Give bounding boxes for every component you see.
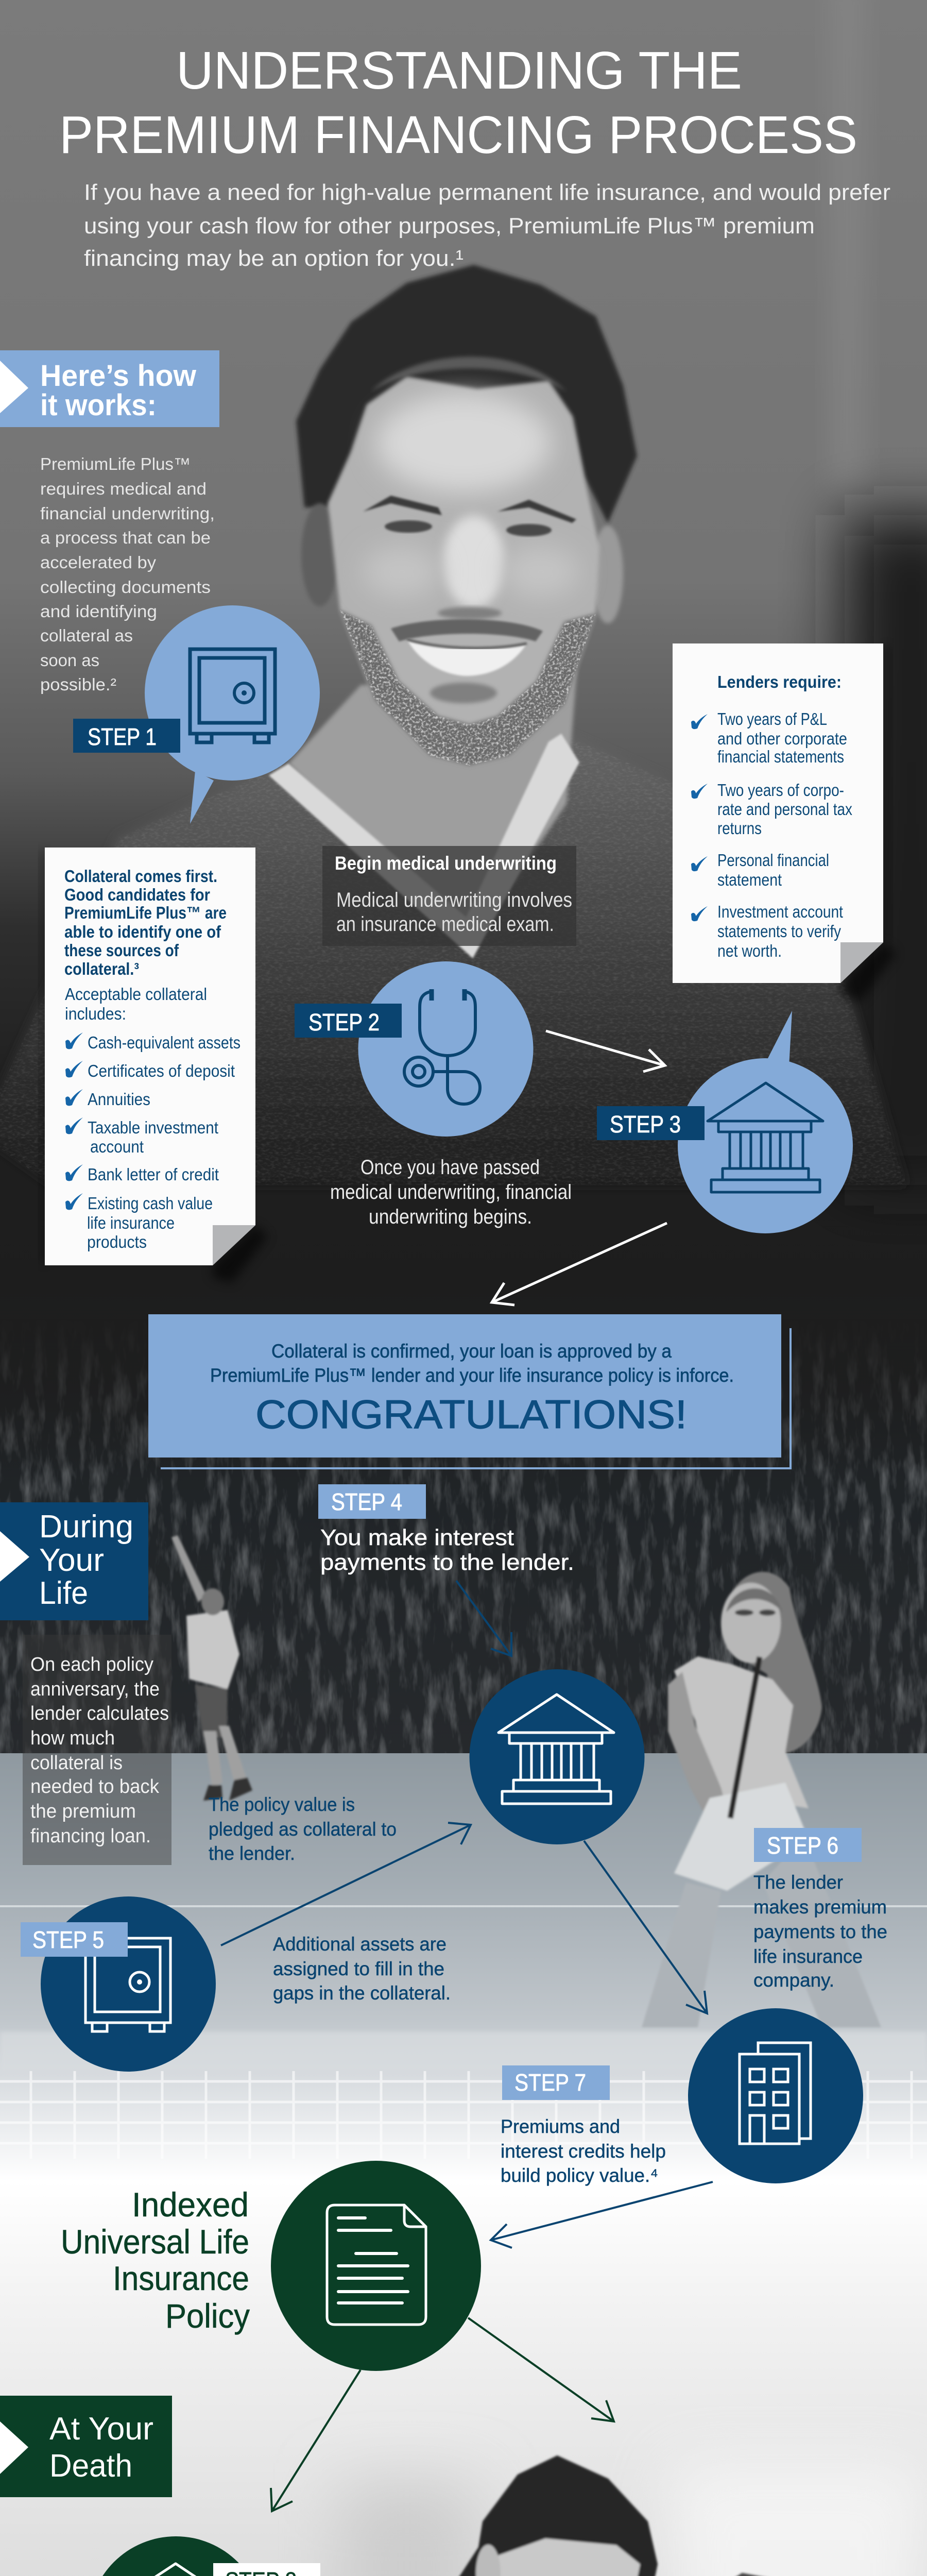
text: lender requirements list: financial statements bbox=[717, 747, 844, 766]
panel: congratulations: CONGRATULATIONS! bbox=[255, 1392, 687, 1437]
callout: policy anniversary: On each policy bbox=[30, 1654, 153, 1675]
title: PREMIUM FINANCING PROCESS bbox=[59, 105, 857, 164]
text block: how it works: collateral as bbox=[40, 626, 133, 645]
text: premiums and credits: build policy value.⁴ bbox=[501, 2165, 658, 2186]
heading: indexed universal life insurance policy: Indexed bbox=[132, 2185, 249, 2224]
callout: begin medical underwriting: Medical underwriting involves bbox=[336, 889, 572, 911]
arrow: step 3 to congratulations bbox=[492, 1223, 667, 1305]
heading: during your life bbox=[0, 1502, 148, 1620]
intro text: If you have a need for high-value permanent life insurance, and would prefer bbox=[84, 180, 890, 205]
heading: indexed universal life insurance policy: Policy bbox=[165, 2297, 250, 2335]
text: acceptable collateral list: Annuities bbox=[88, 1090, 150, 1109]
text block: how it works: a process that can be bbox=[40, 528, 211, 547]
callout: policy anniversary bbox=[23, 1635, 171, 1865]
intro text bbox=[84, 180, 890, 271]
icon: bank bbox=[708, 1083, 823, 1192]
heading: here's how it works: it works: bbox=[40, 388, 157, 422]
heading: during your life: During bbox=[39, 1509, 133, 1545]
arrow: assets to lender bbox=[221, 1823, 471, 1945]
text block: how it works: soon as bbox=[40, 651, 99, 670]
note: collateral requirements bbox=[40, 848, 268, 1283]
text block: how it works: possible.² bbox=[40, 675, 116, 694]
photo: man portrait background bbox=[0, 0, 927, 1288]
text: acceptable collateral list: account bbox=[90, 1137, 144, 1156]
text: acceptable collateral list: Bank letter of credit bbox=[88, 1165, 219, 1184]
text: collateral comes first: Good candidates for bbox=[64, 885, 210, 904]
photo: man serving tennis ball bbox=[171, 1535, 252, 1801]
heading: at your death bbox=[0, 2396, 172, 2497]
text: lender requirements list: Investment account bbox=[717, 902, 843, 921]
callout: policy anniversary: collateral is bbox=[30, 1752, 123, 1774]
text: financial underwriting begins: Once you have passed bbox=[360, 1156, 540, 1179]
text: collateral comes first: Collateral comes first. bbox=[64, 867, 217, 886]
text: lender requirements list: Personal financial bbox=[717, 851, 829, 870]
step 2 bubble bbox=[295, 961, 534, 1137]
photo: man's hair bbox=[296, 265, 637, 523]
text: acceptable collateral list: Cash-equivalent assets bbox=[88, 1033, 241, 1052]
text: additional assets: assigned to fill in the bbox=[273, 1958, 444, 1979]
insurance company icon bbox=[688, 2008, 863, 2183]
text: lender requirements list: statements to verify bbox=[717, 922, 841, 941]
text: acceptable collateral list: includes: bbox=[65, 1004, 126, 1023]
text: additional assets: gaps in the collateral. bbox=[273, 1982, 451, 2004]
icons: check marks bbox=[691, 714, 708, 921]
text: collateral comes first bbox=[64, 867, 227, 978]
text: lender requirements list: net worth. bbox=[717, 941, 782, 960]
panel: congratulations bbox=[148, 1314, 791, 1468]
step 8 bbox=[89, 2536, 320, 2576]
text: interest payments: payments to the lender. bbox=[320, 1550, 574, 1575]
arrow: policy to lender repayment bbox=[271, 2370, 360, 2511]
text: lender requirements list bbox=[717, 709, 852, 960]
text: lender pays premium bbox=[753, 1872, 887, 1991]
policy document icon bbox=[271, 2161, 481, 2371]
label: step 2: STEP 2 bbox=[308, 1009, 380, 1036]
label: step 5 bbox=[21, 1922, 128, 1957]
text: premiums and credits: interest credits help bbox=[501, 2141, 666, 2162]
icons: check marks bbox=[65, 1032, 83, 1210]
step 5 bbox=[21, 1896, 216, 2072]
text: lender requirements list: returns bbox=[717, 819, 762, 838]
step 6: STEP 6 bbox=[767, 1832, 838, 1859]
text: financial underwriting begins: medical underwriting, financial bbox=[330, 1181, 572, 1204]
text: lender pays premium: payments to the bbox=[753, 1921, 887, 1942]
text: financial underwriting begins: underwriting begins. bbox=[369, 1206, 532, 1228]
callout: begin medical underwriting: Begin medical underwriting bbox=[335, 853, 557, 874]
callout: policy anniversary: needed to back bbox=[30, 1776, 160, 1798]
photo: man's ears bbox=[301, 503, 338, 606]
title bbox=[59, 41, 857, 164]
photo: man's face bbox=[328, 377, 599, 766]
text: policy value pledged bbox=[209, 1794, 397, 1864]
arrow: policy to heirs bbox=[468, 2318, 614, 2421]
callout: begin medical underwriting bbox=[322, 846, 576, 946]
text: premiums and credits bbox=[501, 2116, 666, 2186]
photo: mother bbox=[291, 2455, 664, 2576]
icon: bank bbox=[117, 2564, 233, 2576]
text: interest payments bbox=[320, 1525, 574, 1575]
photo: man's beard bbox=[340, 610, 596, 766]
callout: policy anniversary: the premium bbox=[30, 1801, 136, 1822]
text block: how it works: collecting documents bbox=[40, 578, 211, 597]
label: step 1 bbox=[73, 719, 180, 753]
text: acceptable collateral list: Taxable investment bbox=[88, 1118, 218, 1137]
text: acceptable collateral list: Existing cash value bbox=[88, 1194, 213, 1213]
arrow: lender to insurer bbox=[584, 1841, 707, 2013]
text: lender requirements list: statement bbox=[717, 870, 782, 889]
text: interest payments: You make interest bbox=[320, 1525, 514, 1550]
arrow: insurer to policy bbox=[491, 2182, 713, 2248]
step 6 bbox=[753, 1828, 887, 1991]
heading: lenders require: Lenders require: bbox=[717, 672, 842, 691]
heading: during your life: Life bbox=[39, 1575, 88, 1611]
step 4 bbox=[318, 1484, 574, 1575]
text: policy value pledged: The policy value is bbox=[209, 1794, 355, 1815]
label: step 8 bbox=[213, 2563, 320, 2576]
note: lenders require bbox=[673, 643, 896, 1002]
label: step 3 bbox=[597, 1106, 705, 1140]
text: lender pays premium: life insurance bbox=[753, 1946, 863, 1967]
step 1 bubble bbox=[73, 605, 320, 824]
label: step 2 bbox=[295, 1004, 402, 1038]
heading: at your death: Death bbox=[49, 2448, 132, 2484]
text: lender requirements list: Two years of corpo- bbox=[717, 781, 844, 800]
icon: stethoscope bbox=[404, 989, 480, 1104]
heading: indexed universal life insurance policy: Insurance bbox=[113, 2259, 249, 2297]
text block: how it works bbox=[40, 454, 215, 694]
text: lender requirements list: Two years of P&L bbox=[717, 709, 827, 728]
heading: indexed universal life insurance policy: Universal Life bbox=[61, 2223, 249, 2261]
text: policy value pledged: pledged as collateral to bbox=[209, 1819, 397, 1840]
intro text: using your cash flow for other purposes, PremiumLife Plus™ premium bbox=[84, 213, 815, 239]
callout: policy anniversary: how much bbox=[30, 1727, 115, 1749]
text: acceptable collateral list: Certificates of deposit bbox=[88, 1061, 235, 1080]
arrow: step 2 to step 3 bbox=[546, 1031, 665, 1072]
label: step 1: STEP 1 bbox=[88, 723, 157, 750]
step 7: STEP 7 bbox=[514, 2069, 586, 2096]
text block: how it works: financial underwriting, bbox=[40, 504, 215, 523]
text: financial underwriting begins bbox=[330, 1156, 572, 1228]
intro text: financing may be an option for you.¹ bbox=[84, 246, 464, 271]
text: collateral comes first: able to identify one of bbox=[64, 922, 221, 941]
photo: young woman with racket bbox=[642, 1572, 881, 2027]
text: policy value pledged: the lender. bbox=[209, 1843, 295, 1864]
icon: safe bbox=[85, 1938, 170, 2031]
text: lender requirements list: rate and personal tax bbox=[717, 800, 852, 819]
text: lender requirements list: and other corporate bbox=[717, 729, 847, 748]
heading: here's how it works bbox=[0, 350, 219, 427]
panel: congratulations: Collateral is confirmed, your loan is approved by a bbox=[271, 1341, 672, 1362]
text: lender pays premium: The lender bbox=[753, 1872, 843, 1893]
text block: how it works: PremiumLife Plus™ bbox=[40, 454, 191, 473]
heading: indexed universal life insurance policy bbox=[61, 2185, 250, 2335]
text: premiums and credits: Premiums and bbox=[501, 2116, 620, 2137]
label: step 5: STEP 5 bbox=[32, 1926, 104, 1953]
photo: tennis court background bbox=[0, 1288, 927, 2181]
step 3 bubble bbox=[597, 1011, 853, 1233]
step 4: STEP 4 bbox=[331, 1488, 402, 1515]
text: acceptable collateral list bbox=[65, 985, 241, 1251]
step 4 lender icon bbox=[470, 1669, 645, 1844]
text: lender pays premium: company. bbox=[753, 1970, 834, 1991]
text block: how it works: requires medical and bbox=[40, 479, 207, 498]
icon: safe bbox=[190, 649, 275, 742]
text block: how it works: accelerated by bbox=[40, 553, 157, 572]
text block: how it works: and identifying bbox=[40, 602, 157, 621]
text: acceptable collateral list: Acceptable collateral bbox=[65, 985, 207, 1004]
panel: congratulations: PremiumLife Plus™ lender and your life insurance policy is inforce. bbox=[210, 1365, 734, 1386]
text: acceptable collateral list: life insurance bbox=[87, 1213, 175, 1232]
heading: during your life: Your bbox=[39, 1543, 104, 1578]
callout: policy anniversary: anniversary, the bbox=[30, 1679, 160, 1700]
photo: mother and daughter background bbox=[0, 2181, 927, 2576]
photo: daughter bbox=[656, 2573, 927, 2576]
heading: at your death: At Your bbox=[49, 2411, 153, 2447]
text: acceptable collateral list: products bbox=[87, 1232, 147, 1251]
text: lender pays premium: makes premium bbox=[753, 1896, 887, 1918]
text: collateral comes first: these sources of bbox=[64, 941, 179, 960]
text: collateral comes first: PremiumLife Plus™ are bbox=[64, 903, 227, 922]
step 7 bbox=[501, 2065, 666, 2186]
callout: policy anniversary: lender calculates bbox=[30, 1703, 169, 1724]
arrow: interest to lender bbox=[456, 1581, 511, 1656]
text: collateral comes first: collateral.³ bbox=[64, 959, 139, 978]
photo: man's smile bbox=[407, 639, 527, 676]
heading: here's how it works: Here’s how bbox=[40, 359, 197, 393]
text: additional assets: Additional assets are bbox=[273, 1934, 447, 1955]
callout: begin medical underwriting: an insurance medical exam. bbox=[336, 913, 554, 936]
callout: policy anniversary: financing loan. bbox=[30, 1825, 151, 1847]
title: UNDERSTANDING THE bbox=[176, 41, 742, 100]
text: additional assets bbox=[273, 1934, 451, 2004]
label: step 3: STEP 3 bbox=[610, 1111, 681, 1138]
